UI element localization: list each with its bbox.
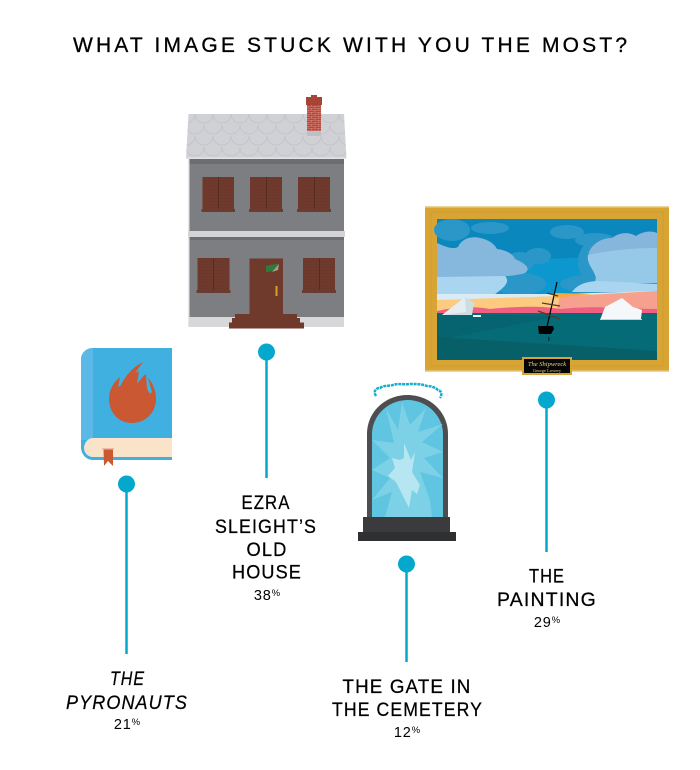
plaque bbox=[522, 357, 572, 375]
connector: gate bbox=[398, 556, 415, 662]
ship bbox=[538, 282, 560, 341]
title: WHAT IMAGE STUCK WITH YOU THE MOST? bbox=[73, 34, 627, 57]
label: the pyronauts: 21 bbox=[114, 717, 132, 733]
sea bbox=[437, 313, 657, 360]
label: ezra sleight's old house: EZRA bbox=[242, 492, 290, 514]
left cloud bbox=[437, 237, 528, 278]
label: ezra sleight's old house: SLEIGHT’S bbox=[215, 516, 317, 538]
label: the painting: 29 bbox=[534, 615, 552, 631]
icon: gate bbox=[358, 384, 456, 541]
bookmark bbox=[104, 449, 113, 466]
sunset bbox=[437, 291, 657, 313]
label: the gate in the cemetery: 12 bbox=[394, 725, 412, 741]
plaque: The Shipwreck bbox=[528, 361, 566, 368]
plinth bbox=[358, 517, 456, 541]
label: ezra sleight's old house: HOUSE bbox=[232, 562, 302, 584]
label: the pyronauts: % bbox=[132, 717, 141, 728]
upper windows bbox=[202, 177, 331, 212]
label: the painting: THE bbox=[529, 566, 565, 588]
label: the painting bbox=[497, 566, 597, 631]
roof bbox=[186, 114, 346, 159]
connector: painting bbox=[538, 392, 555, 552]
connector: house bbox=[258, 344, 275, 478]
flame bbox=[109, 362, 156, 423]
right cloud bbox=[588, 232, 657, 283]
sky bbox=[437, 219, 657, 360]
lower windows bbox=[196, 258, 336, 293]
frost garland bbox=[375, 384, 441, 398]
icon: book bbox=[81, 348, 172, 466]
connector: pyronauts bbox=[118, 476, 135, 654]
foundation bbox=[189, 317, 344, 327]
label: the gate in the cemetery: THE GATE IN bbox=[342, 676, 472, 698]
label: the gate in the cemetery: THE CEMETERY bbox=[332, 699, 483, 721]
door bbox=[250, 258, 283, 316]
label: the gate in the cemetery bbox=[332, 676, 483, 741]
label: the pyronauts: PYRONAUTS bbox=[66, 692, 188, 714]
label: the painting: PAINTING bbox=[497, 589, 597, 611]
label: the painting: % bbox=[552, 615, 561, 626]
label: ezra sleight's old house: OLD bbox=[246, 539, 288, 561]
label: ezra sleight's old house: % bbox=[272, 588, 281, 599]
icebergs bbox=[442, 297, 642, 320]
clouds bbox=[434, 219, 657, 305]
label: the gate in the cemetery: % bbox=[412, 725, 421, 736]
chimney bbox=[306, 95, 322, 136]
icon: painting bbox=[425, 206, 669, 375]
label: the pyronauts bbox=[66, 668, 188, 733]
plaque: George Lowery bbox=[533, 368, 562, 373]
label: ezra sleight's old house bbox=[215, 492, 317, 604]
floor band bbox=[188, 231, 345, 237]
steps bbox=[229, 314, 304, 328]
label: ezra sleight's old house: 38 bbox=[254, 588, 272, 604]
label: the pyronauts: THE bbox=[110, 668, 145, 690]
icon: house bbox=[186, 95, 346, 328]
